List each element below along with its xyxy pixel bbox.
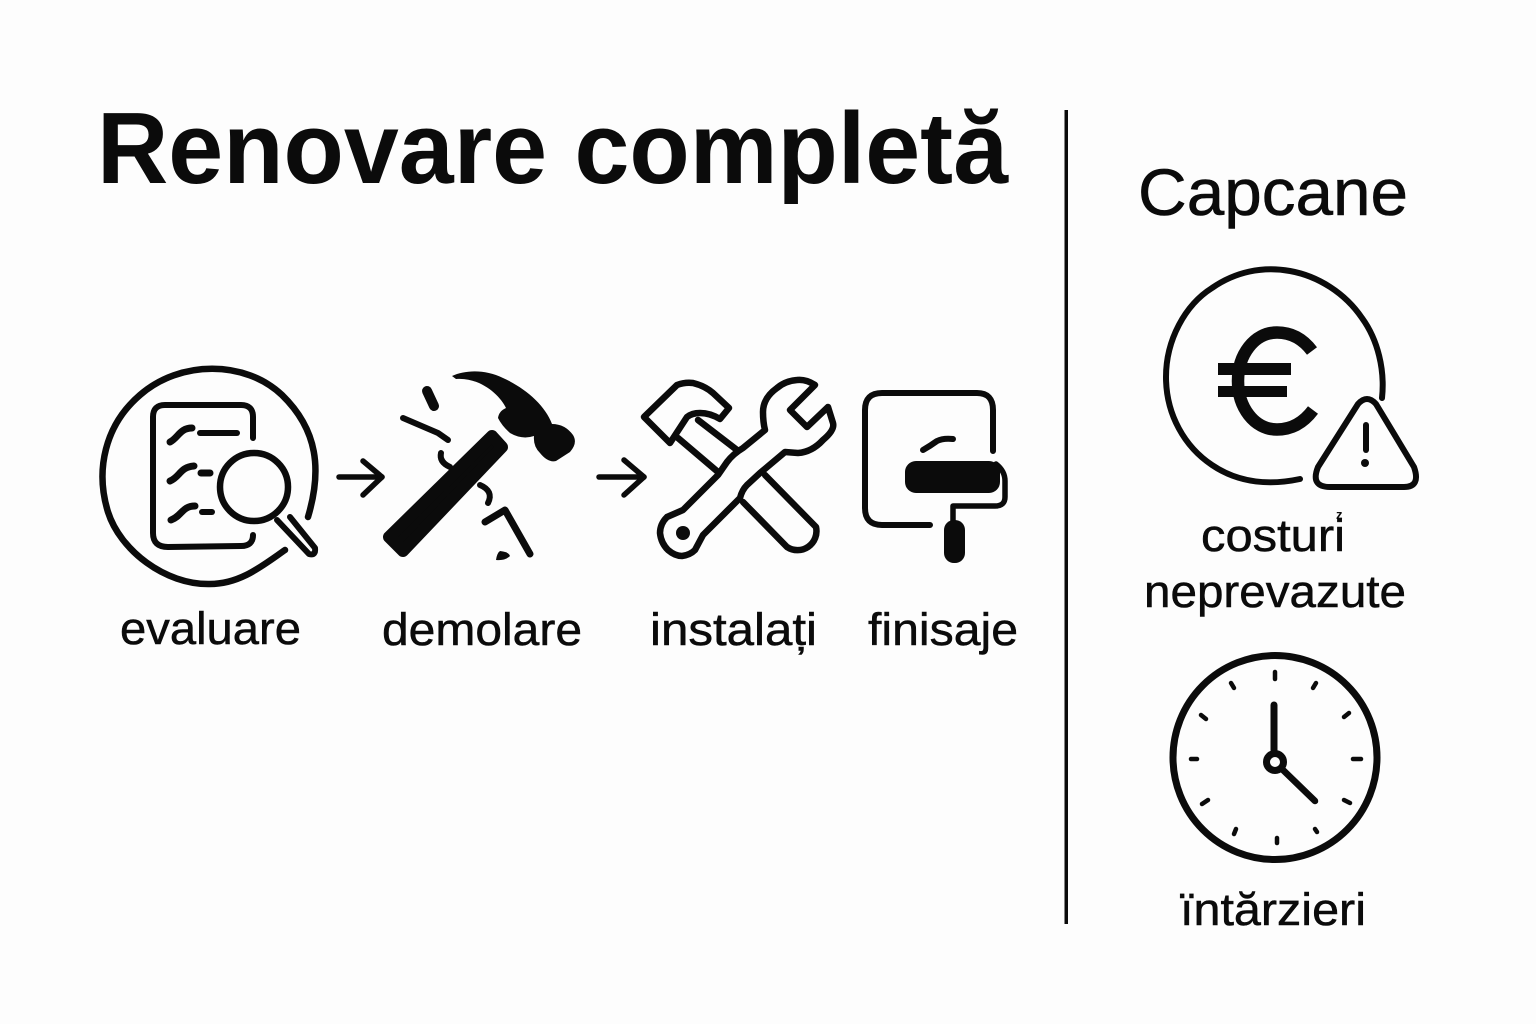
icon: clock [1173,656,1377,860]
label: instalați: instalați [650,604,817,655]
label: ïntărzieri: ïntărzieri [1180,884,1366,935]
label: demolare: demolare [382,604,582,655]
label: finisaje: finisaje [868,604,1018,655]
label: neprevazute: neprevazute [1144,566,1406,617]
vertical divider [1064,110,1068,924]
icon: evaluation document in circle with magnifier [103,369,315,584]
arrow: evaluare to demolare [339,461,382,495]
label: evaluare: evaluare [120,603,301,654]
title: Renovare completă [97,93,1009,205]
arrow: demolare to instalați [599,460,644,495]
label: costuri: costuri [1201,510,1345,561]
heading: Capcane: Capcane [1138,155,1408,229]
icon: hammer and debris [389,371,575,560]
icon: paint roller and wall [865,393,1005,563]
icon: crossed hammer and wrench [644,380,833,556]
label: diacritic mark above costuri: z [1336,507,1343,522]
icon: euro coin with warning triangle [1166,269,1416,487]
